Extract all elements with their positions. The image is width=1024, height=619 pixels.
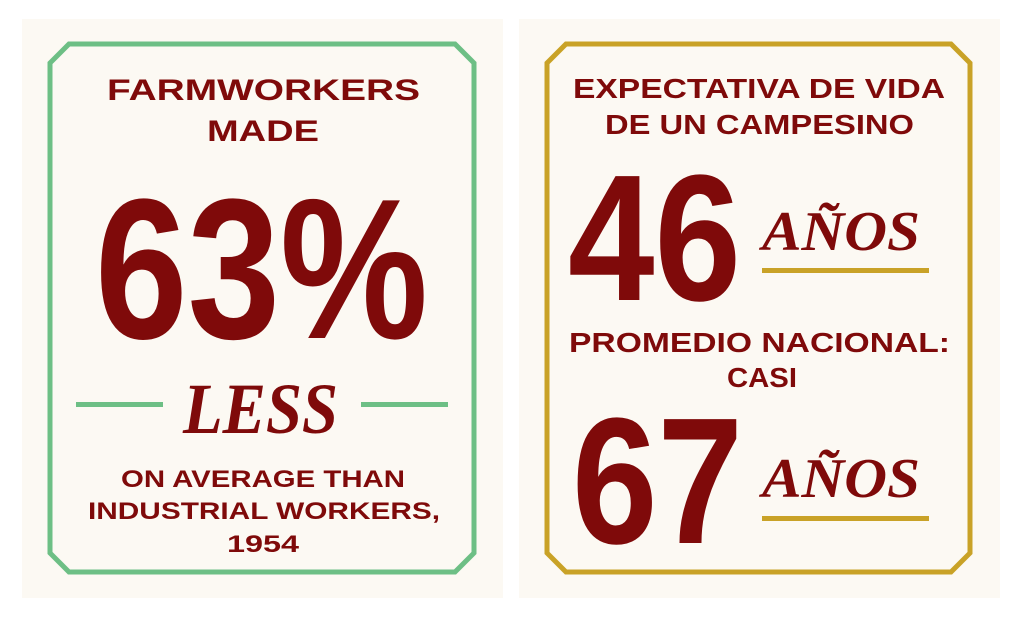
heading: expectativa de vida: DE UN CAMPESINO (605, 109, 914, 140)
panel: life expectancy (519, 19, 1000, 598)
less with lines (76, 369, 448, 449)
caption: 1954 (227, 531, 300, 558)
caption: INDUSTRIAL WORKERS, (88, 498, 440, 525)
stat: 46 años: AÑOS (759, 201, 920, 263)
stat: 67 años (572, 381, 929, 582)
panel: farmworkers wages (22, 19, 503, 598)
heading: expectativa de vida: EXPECTATIVA DE VIDA (573, 73, 945, 104)
text: promedio nacional: CASI (727, 362, 797, 393)
stat: 67 años: 67 (572, 381, 743, 582)
gold frame (547, 44, 970, 572)
stat: 67 años: AÑOS (759, 448, 920, 510)
big number 63%: 63% (95, 158, 428, 381)
heading: expectativa de vida (573, 73, 945, 140)
heading: farmworkers made: FARMWORKERS (107, 74, 420, 107)
text: promedio nacional (569, 327, 950, 393)
green frame (50, 44, 474, 572)
stat: 46 años: 46 (568, 138, 741, 339)
less with lines: LESS (182, 369, 338, 449)
heading: farmworkers made: MADE (207, 115, 319, 148)
caption: ON AVERAGE THAN (121, 466, 405, 493)
heading: farmworkers made (107, 74, 420, 148)
caption (88, 466, 440, 558)
stat: 46 años (568, 138, 929, 339)
text: promedio nacional: PROMEDIO NACIONAL: (569, 327, 950, 358)
